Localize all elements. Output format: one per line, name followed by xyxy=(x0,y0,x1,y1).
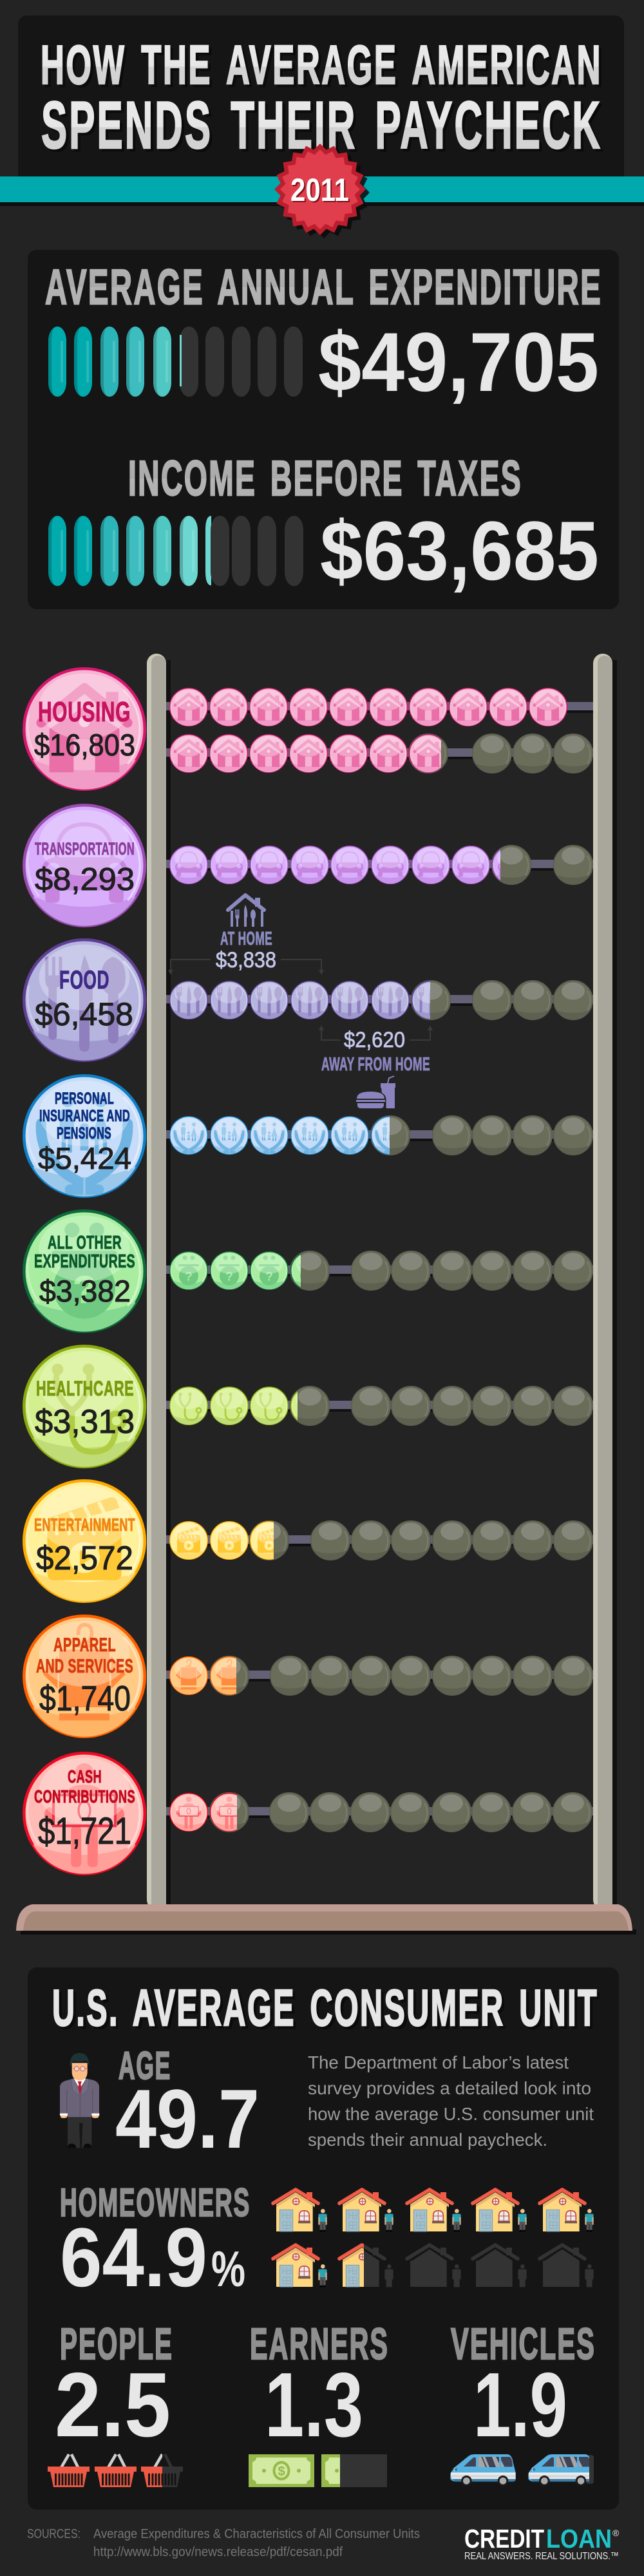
abacus base xyxy=(16,1904,636,1935)
logo: creditloan: ® xyxy=(612,2528,620,2538)
abacus frame xyxy=(147,654,617,1909)
icon: burger and drink xyxy=(356,1076,395,1108)
bubble: all other: $3,382 xyxy=(39,1274,131,1308)
bubble: cash contributions: CONTRIBUTIONS xyxy=(34,1786,135,1806)
value: at home: $3,838 xyxy=(216,948,276,972)
beads: healthcare xyxy=(170,1387,592,1425)
label: at home: AT HOME xyxy=(220,929,272,949)
beads: all other xyxy=(170,1251,592,1290)
sources: SOURCES: xyxy=(27,2527,80,2541)
logo: creditloan: LOAN xyxy=(546,2524,612,2553)
sources: Average Expenditures & Characteristics of All Consumer Units xyxy=(93,2527,420,2541)
row: entertainment xyxy=(24,1481,592,1602)
description: spends their annual paycheck. xyxy=(308,2130,547,2150)
bubble: insurance xyxy=(24,1075,145,1197)
bubble: entertainment xyxy=(24,1481,145,1602)
icons: houses xyxy=(273,2190,594,2287)
row: food xyxy=(24,940,592,1061)
logo: creditloan xyxy=(464,2524,620,2562)
row: all other expenditures xyxy=(24,1211,592,1332)
panel: header xyxy=(18,15,624,189)
gauge: income xyxy=(48,516,303,586)
label: earners: EARNERS xyxy=(250,2319,389,2369)
bubble: insurance: INSURANCE AND xyxy=(39,1107,130,1125)
icons: dollar bills xyxy=(249,2454,387,2487)
bubble: housing: $16,803 xyxy=(34,728,135,762)
bubble: all other xyxy=(24,1211,145,1332)
callout: away from home xyxy=(319,1025,433,1108)
bubble: food: $6,458 xyxy=(35,996,133,1032)
bubble: housing: HOUSING xyxy=(38,696,131,728)
bracket: at home xyxy=(168,960,324,975)
bracket: away from home xyxy=(319,1025,433,1040)
bubble: transportation: $8,293 xyxy=(35,862,135,897)
beads: food xyxy=(170,981,592,1019)
beads: cash contributions xyxy=(170,1793,592,1832)
row: housing xyxy=(24,668,592,790)
bubble: cash contributions xyxy=(24,1753,145,1874)
panel: expenditure and income xyxy=(28,250,619,609)
bubble: entertainment: ENTERTAINMENT xyxy=(34,1515,135,1535)
bubble: entertainment: $2,572 xyxy=(36,1540,133,1577)
value: away from home: $2,620 xyxy=(344,1028,405,1052)
description xyxy=(308,2052,594,2150)
description: The Department of Labor’s latest xyxy=(308,2052,569,2072)
bubble: housing xyxy=(24,668,145,790)
value: vehicles: 1.9 xyxy=(473,2354,567,2456)
beads: entertainment xyxy=(170,1521,592,1560)
sources: http://www.bls.gov/news.release/pdf/cesan.pdf xyxy=(93,2545,343,2559)
beads: housing row 1 xyxy=(170,688,567,726)
row: transportation xyxy=(24,805,592,926)
beads: housing row 2 xyxy=(170,734,592,773)
icon: man in suit xyxy=(60,2053,99,2148)
label: homeowners: HOMEOWNERS xyxy=(60,2181,251,2224)
description: how the average U.S. consumer unit xyxy=(308,2104,594,2124)
bubble: healthcare: HEALTHCARE xyxy=(36,1377,134,1400)
value: people: 2.5 xyxy=(55,2354,171,2456)
gauge: expenditure xyxy=(48,327,303,397)
bubble: cash contributions: CASH xyxy=(68,1766,102,1786)
bubble: cash contributions: $1,721 xyxy=(38,1810,131,1852)
label: age: AGE xyxy=(118,2044,171,2087)
bubble: insurance: PENSIONS xyxy=(57,1124,111,1142)
icons: baskets xyxy=(48,2454,183,2487)
row: healthcare xyxy=(24,1346,592,1467)
value: earners: 1.3 xyxy=(265,2354,363,2456)
abacus rods xyxy=(166,702,593,1818)
bubble: insurance: $5,424 xyxy=(38,1141,131,1175)
bubble: apparel: APPAREL xyxy=(53,1634,116,1656)
panel: consumer unit xyxy=(28,1967,619,2510)
label: away from home: AWAY FROM HOME xyxy=(321,1054,430,1075)
bubble: transportation: TRANSPORTATION xyxy=(35,839,135,858)
row: apparel and services xyxy=(24,1616,592,1737)
teal ribbon xyxy=(0,176,644,206)
callout: at home xyxy=(168,895,324,975)
bubble: transportation xyxy=(24,805,145,926)
sources xyxy=(27,2527,420,2559)
badge year: 2011 xyxy=(290,172,349,208)
value: homeowners: 64.9 xyxy=(60,2210,207,2304)
year badge xyxy=(274,144,370,238)
row: cash contributions xyxy=(24,1753,592,1874)
row: personal insurance and pensions xyxy=(24,1075,592,1197)
bubble: apparel: $1,740 xyxy=(39,1678,131,1718)
icon: house with cutlery xyxy=(228,895,264,927)
bubble: healthcare: $3,313 xyxy=(35,1403,135,1441)
beads: apparel xyxy=(170,1656,592,1695)
value: income: $63,685 xyxy=(320,504,599,598)
bubble: insurance: PERSONAL xyxy=(55,1090,114,1108)
bubble: food xyxy=(24,940,145,1061)
bubble: food: FOOD xyxy=(59,966,109,994)
value: expenditure: $49,705 xyxy=(318,315,599,409)
bubble: all other: ALL OTHER xyxy=(48,1233,122,1253)
bubble: healthcare xyxy=(24,1346,145,1467)
logo: creditloan: CREDIT xyxy=(464,2524,544,2553)
value: homeowners: % xyxy=(211,2240,245,2297)
description: survey provides a detailed look into xyxy=(308,2078,591,2098)
bubble: apparel: AND SERVICES xyxy=(36,1656,133,1677)
beads: transportation xyxy=(170,846,592,884)
label: people: PEOPLE xyxy=(60,2319,173,2369)
value: age: 49.7 xyxy=(115,2072,260,2166)
icons: vans xyxy=(450,2454,594,2486)
bubble: all other: EXPENDITURES xyxy=(34,1251,135,1272)
bubble: apparel xyxy=(24,1616,145,1737)
beads: insurance xyxy=(170,1116,592,1155)
